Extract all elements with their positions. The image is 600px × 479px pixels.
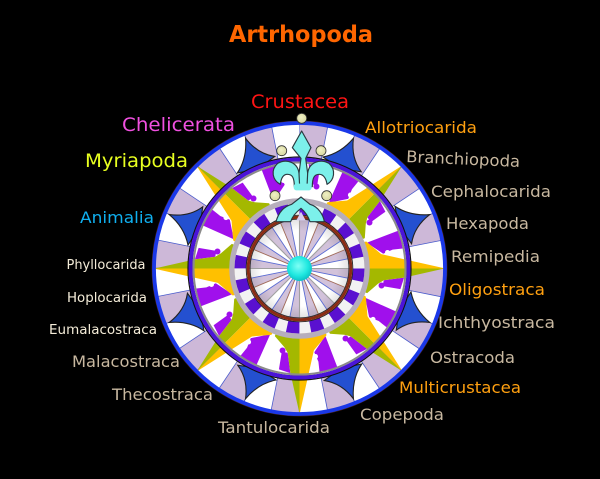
label: Eumalacostraca: Eumalacostraca — [49, 323, 157, 338]
label: Phyllocarida: Phyllocarida — [66, 258, 146, 273]
label: Myriapoda: Myriapoda — [85, 150, 188, 172]
label: Ichthyostraca: Ichthyostraca — [438, 313, 555, 332]
icon: fleur base bar — [294, 184, 312, 190]
label: Hexapoda: Hexapoda — [446, 214, 529, 233]
label: Allotriocarida: Allotriocarida — [365, 118, 477, 137]
title: Artrhopoda — [229, 22, 373, 48]
outer blue ring — [152, 121, 447, 416]
label: Animalia: Animalia — [80, 208, 154, 227]
rosette diagram — [152, 121, 447, 416]
icon: diamond with stem — [292, 131, 311, 187]
inner annulus base — [190, 160, 408, 378]
label: Branchiopoda: Branchiopoda — [406, 147, 521, 171]
label: Multicrustacea: Multicrustacea — [399, 378, 521, 397]
checker ring — [232, 201, 367, 336]
icon: lower crown — [276, 197, 324, 222]
label: Tantulocarida: Tantulocarida — [217, 418, 330, 437]
knobs — [270, 113, 332, 201]
label: Cephalocarida: Cephalocarida — [431, 182, 551, 201]
label: Ostracoda: Ostracoda — [430, 348, 515, 367]
inner purple ring — [188, 157, 411, 380]
central wheel — [250, 218, 350, 318]
label: Chelicerata: Chelicerata — [122, 114, 235, 136]
compass star yellow and green points — [154, 146, 446, 414]
label: Remipedia: Remipedia — [451, 247, 540, 266]
label: Crustacea: Crustacea — [251, 91, 349, 113]
label: Malacostraca: Malacostraca — [72, 352, 180, 371]
icon: crown centre — [296, 212, 306, 220]
label: Copepoda: Copepoda — [360, 405, 444, 424]
label: Thecostraca: Thecostraca — [111, 385, 213, 404]
outer band of lilac and white segments — [172, 142, 426, 396]
cyan hub — [287, 256, 312, 281]
purple battlement blocks — [179, 148, 420, 389]
blue spandrels — [161, 130, 438, 407]
icon: right petal — [307, 161, 334, 187]
label: Hoplocarida: Hoplocarida — [67, 291, 147, 306]
label: Oligostraca: Oligostraca — [449, 280, 545, 299]
brown ring — [246, 215, 353, 322]
fleur-de-lis ornament — [273, 131, 334, 222]
icon: left petal — [273, 161, 300, 187]
